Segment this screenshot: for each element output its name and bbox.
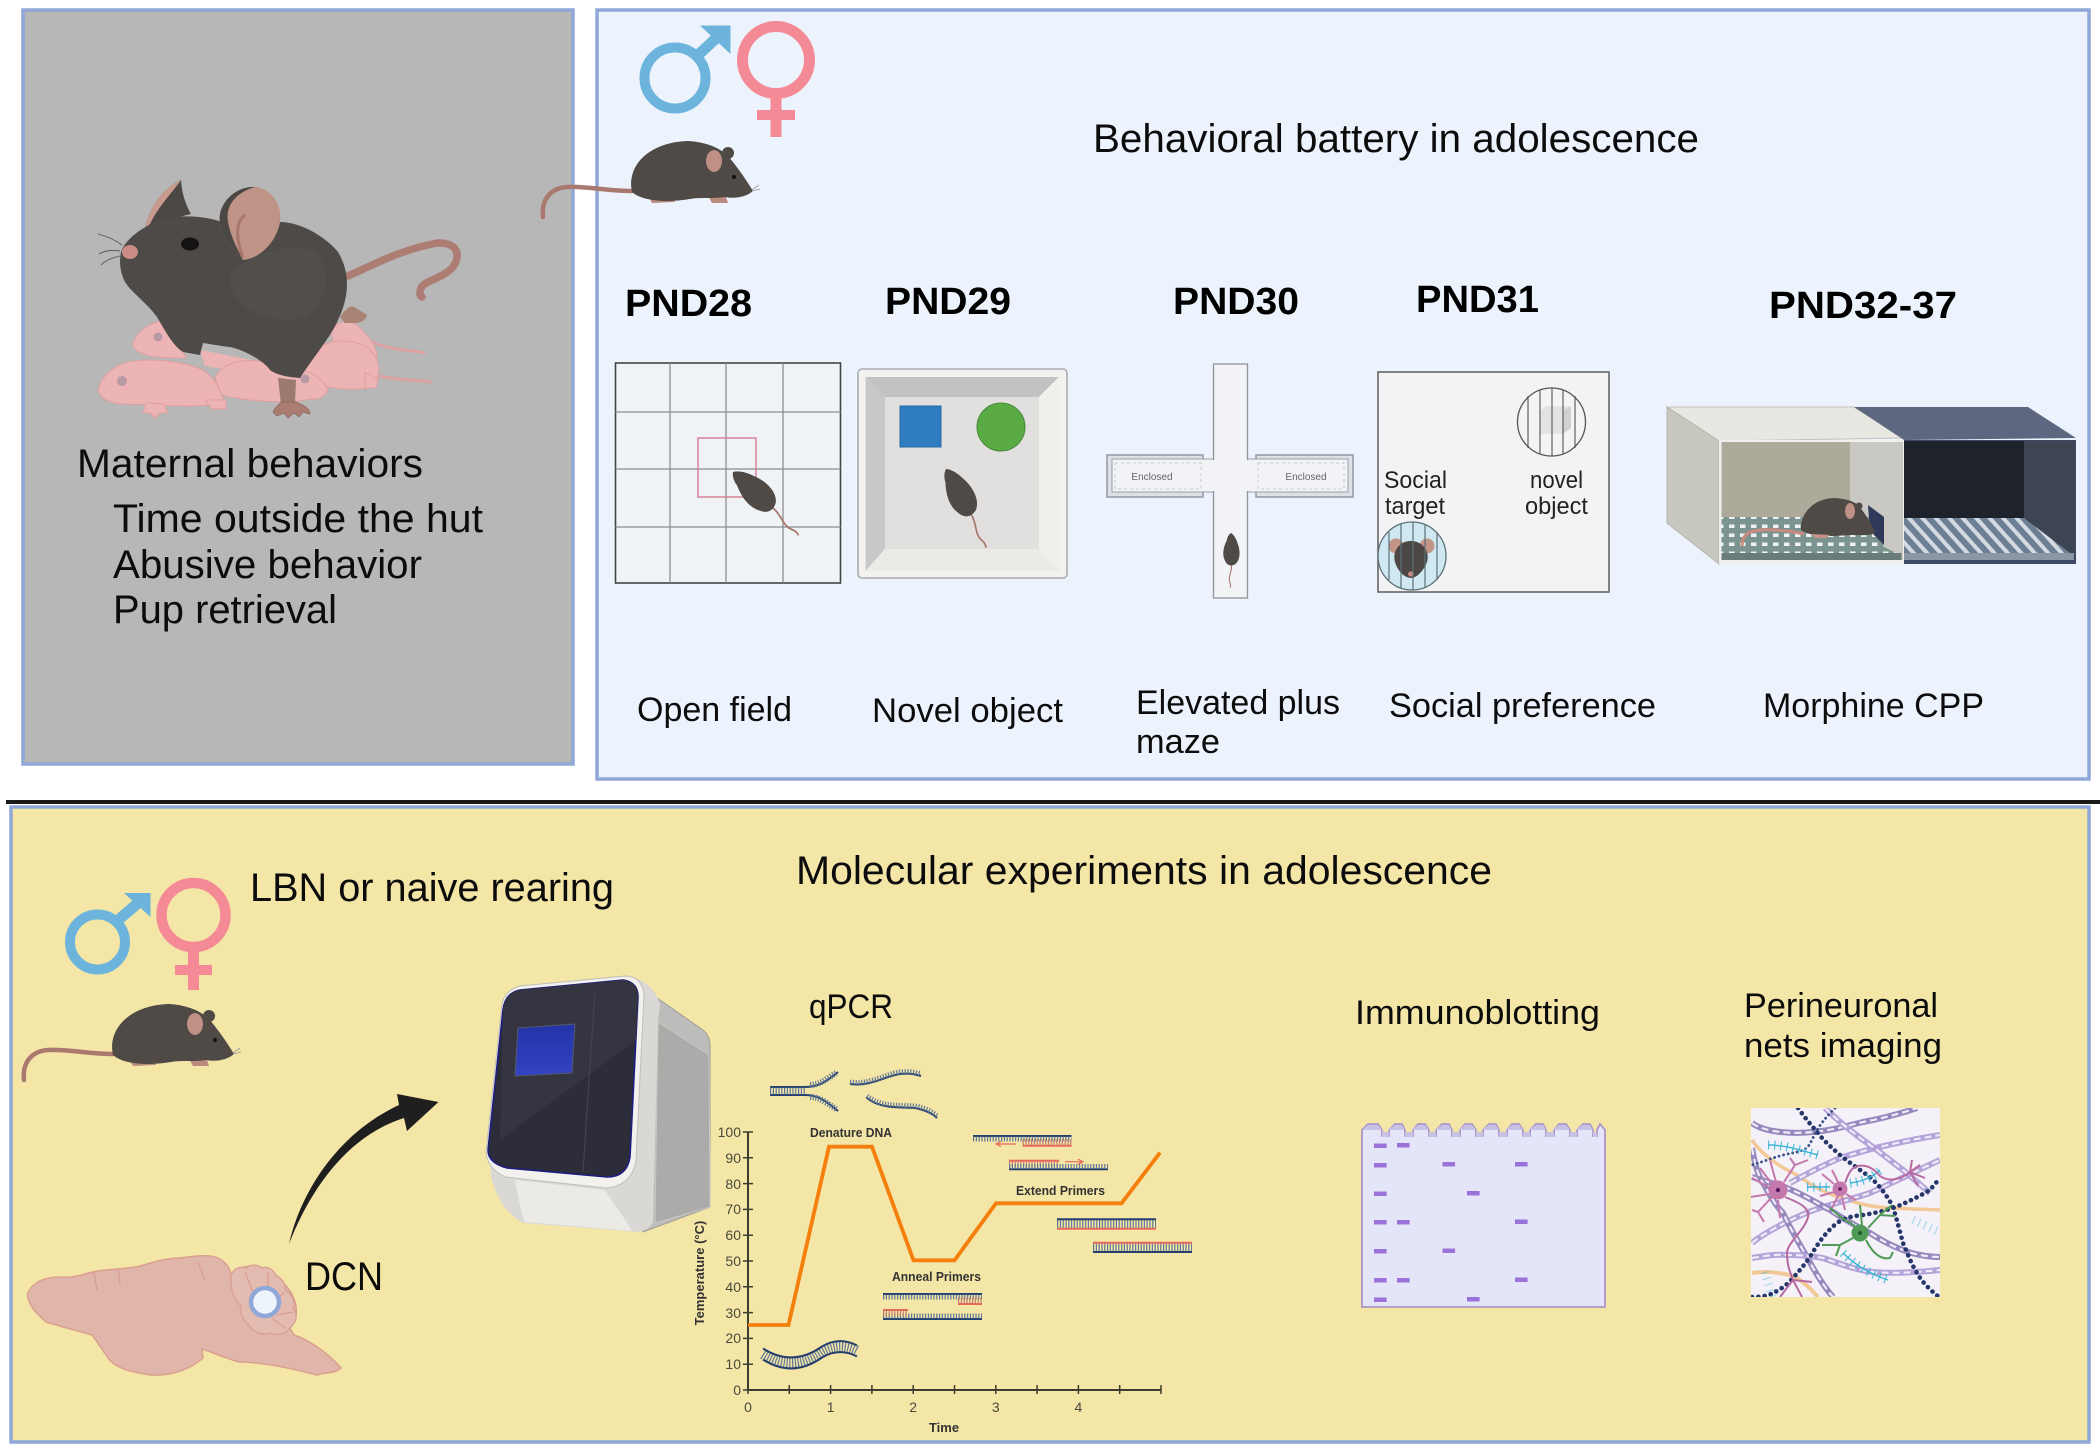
mouse top view	[935, 462, 1000, 553]
label: anneal: Anneal Primers	[892, 1269, 981, 1284]
label: elevated plus: Elevated plus	[1136, 684, 1340, 722]
diagram: social preference	[1378, 372, 1609, 592]
x tick labels: 2	[909, 1399, 917, 1415]
eye	[181, 238, 199, 250]
diagram: open field	[616, 363, 840, 583]
text: social: Social	[1384, 467, 1447, 494]
label: open field: Open field	[637, 691, 792, 729]
y tick labels: 50	[725, 1253, 741, 1269]
diagram: novel object	[858, 369, 1067, 578]
white front frame	[486, 976, 644, 1188]
leg	[278, 378, 296, 404]
x tick labels: 4	[1075, 1399, 1083, 1415]
female symbol	[162, 883, 226, 990]
whiskers	[98, 234, 122, 265]
light compartment	[1667, 407, 1904, 564]
text: maternal behaviors heading: Maternal behaviors	[77, 442, 423, 486]
body	[120, 216, 347, 378]
y tick labels: 60	[725, 1227, 741, 1243]
axis label: temperature: Temperature (°C)	[692, 1221, 707, 1325]
axes	[748, 1132, 1161, 1390]
icon: mother mouse with pups	[98, 180, 457, 418]
cyan ferns	[1765, 1145, 1940, 1297]
DNA: starting double helix	[763, 1341, 857, 1368]
diagram: morphine CPP box	[1667, 407, 2076, 564]
mouse top view	[724, 462, 809, 543]
y tick labels	[718, 1124, 741, 1398]
y tick labels: 80	[725, 1176, 741, 1192]
female symbol	[742, 26, 810, 137]
arrow: brain to machine	[289, 1094, 438, 1244]
enclosed label right: Enclosed	[1285, 472, 1327, 483]
pup eyes	[117, 332, 310, 386]
DNA: finished copies	[1057, 1219, 1192, 1252]
icon: qPCR machine	[486, 976, 710, 1232]
blue screen	[515, 1024, 575, 1076]
male symbol	[644, 26, 730, 108]
label: social preference: Social preference	[1389, 687, 1656, 725]
x ticks	[748, 1385, 1161, 1394]
blue square object	[900, 406, 941, 447]
icon: adolescent mouse top	[543, 141, 760, 217]
dark front panel	[488, 980, 638, 1177]
front ear	[220, 187, 280, 260]
panel: molecular experiments	[11, 807, 2089, 1442]
panel: maternal behaviors	[23, 10, 573, 764]
heading: PND28: PND28	[625, 283, 752, 325]
hind paw	[340, 307, 367, 323]
social target cage	[1378, 522, 1446, 590]
enclosed label left: Enclosed	[1131, 472, 1173, 483]
mouse top view	[1223, 533, 1240, 588]
y tick labels: 10	[725, 1356, 741, 1372]
green neuron	[1822, 1205, 1895, 1258]
text: DCN: DCN	[305, 1255, 383, 1299]
DNA: denaturing fork	[770, 1072, 937, 1118]
text: immunoblotting: Immunoblotting	[1355, 994, 1600, 1032]
text: novel: novel	[1530, 467, 1583, 494]
text: LBN or naive rearing: LBN or naive rearing	[250, 866, 614, 910]
y tick labels: 90	[725, 1150, 741, 1166]
text: target: target	[1385, 493, 1445, 520]
x tick labels: 3	[992, 1399, 1000, 1415]
orange fibres	[1752, 1140, 1940, 1297]
title: molecular experiments: Molecular experiments in adolescence	[796, 849, 1492, 893]
novel object cage	[1518, 388, 1586, 456]
chart: PCR temperature cycle	[692, 1072, 1192, 1435]
purple matrix braids	[1752, 1108, 1940, 1297]
pink neuron right	[1820, 1160, 1925, 1210]
icon: male and female symbols top	[644, 26, 810, 137]
DNA: extending strands	[973, 1136, 1108, 1169]
label: morphine CPP: Morphine CPP	[1763, 687, 1984, 725]
diagram: elevated plus maze	[1107, 364, 1353, 598]
mouse in chamber	[1742, 498, 1875, 546]
icon: brain with DCN	[28, 1256, 341, 1375]
label: extend: Extend Primers	[1016, 1183, 1105, 1198]
y tick labels: 70	[725, 1201, 741, 1217]
heading: PND31: PND31	[1416, 279, 1539, 321]
highlight	[230, 248, 326, 320]
heading: PND30: PND30	[1173, 281, 1299, 323]
label: novel object: Novel object	[872, 692, 1064, 730]
male symbol	[70, 893, 150, 970]
label: denature: Denature DNA	[810, 1125, 893, 1140]
text: time outside the hut: Time outside the hut	[113, 497, 483, 541]
panel: behavioral battery	[597, 10, 2089, 779]
icon: adolescent mouse bottom	[24, 1004, 241, 1080]
y tick labels: 100	[718, 1124, 741, 1140]
dark compartment	[1854, 407, 2076, 564]
text: perineuronal: Perineuronal	[1744, 987, 1938, 1025]
y tick labels: 0	[733, 1382, 741, 1398]
y tick labels: 40	[725, 1279, 741, 1295]
icon: male and female symbols bottom	[70, 883, 226, 990]
gel well shading	[1364, 1125, 1597, 1137]
x tick labels: 0	[744, 1399, 752, 1415]
text: qPCR: qPCR	[809, 988, 893, 1026]
green round object	[977, 403, 1025, 451]
y ticks	[743, 1132, 753, 1390]
axis label: time: Time	[929, 1420, 959, 1435]
x tick labels: 1	[827, 1399, 835, 1415]
foot	[273, 402, 310, 418]
beaded chains	[1752, 1108, 1940, 1297]
pink neuron left	[1750, 1158, 1812, 1297]
text: nets imaging: nets imaging	[1744, 1027, 1942, 1065]
temperature line	[748, 1147, 1160, 1325]
tail	[348, 243, 457, 297]
image: perineuronal nets illustration	[1750, 1108, 1940, 1297]
gel bands	[1374, 1143, 1528, 1302]
text: object: object	[1525, 493, 1588, 520]
divider line	[6, 800, 2100, 804]
DCN highlight circle	[251, 1288, 279, 1316]
heading: PND29: PND29	[885, 281, 1011, 323]
x tick labels	[744, 1399, 1083, 1415]
y tick labels: 20	[725, 1330, 741, 1346]
text: pup retrieval: Pup retrieval	[113, 588, 337, 632]
back ear	[145, 180, 191, 228]
nose	[122, 245, 138, 259]
heading: PND32-37: PND32-37	[1769, 285, 1957, 327]
DNA: anneal strands	[883, 1294, 982, 1319]
pups	[98, 320, 432, 418]
label: maze: maze	[1136, 723, 1220, 761]
y tick labels: 30	[725, 1305, 741, 1321]
diagram: immunoblot gel	[1362, 1124, 1605, 1307]
text: abusive behavior: Abusive behavior	[113, 543, 422, 587]
title: behavioral battery: Behavioral battery in adolescence	[1093, 117, 1699, 161]
